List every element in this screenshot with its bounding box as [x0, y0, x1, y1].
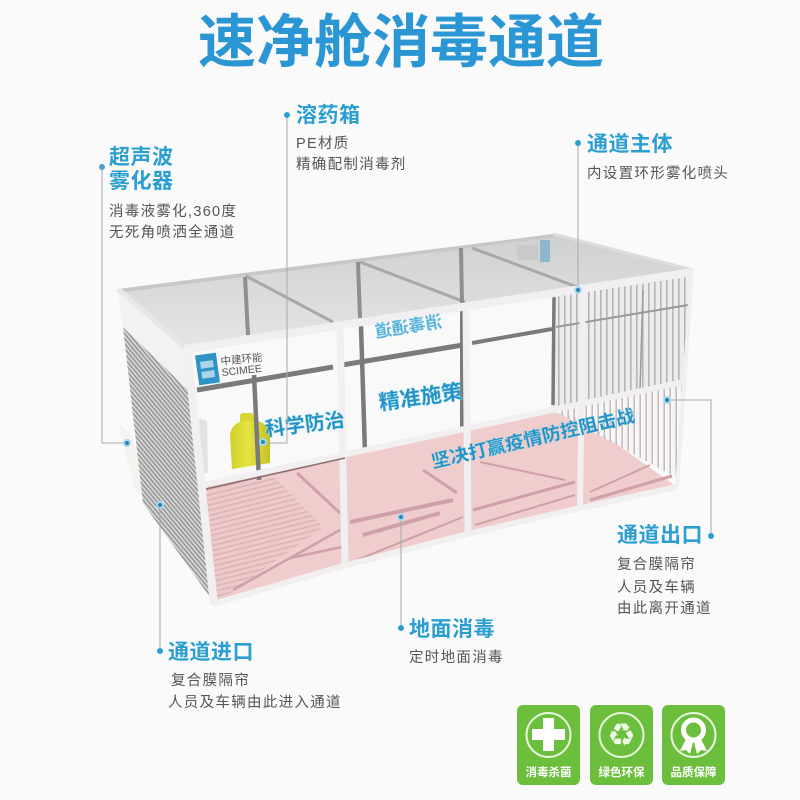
disinfection channel structure	[118, 234, 693, 605]
callout: channel entrance: 通道进口	[168, 641, 254, 664]
badge: disinfect and sterilize: 消毒杀菌	[526, 765, 572, 779]
roof	[118, 234, 693, 347]
callout: channel exit: 由此离开通道	[617, 600, 712, 617]
callout: floor disinfection	[398, 514, 504, 666]
badge: quality assurance	[662, 705, 725, 785]
callout: channel entrance: 人员及车辆由此进入通道	[168, 694, 342, 711]
badge: disinfect and sterilize	[517, 705, 580, 785]
callout: channel entrance: 复合膜隔帘	[171, 671, 250, 689]
callout: channel exit: 通道出口	[617, 524, 703, 547]
callout: channel entrance	[157, 502, 342, 711]
roof beams	[246, 248, 580, 322]
back wall	[187, 292, 553, 487]
logo panel: 中建环能	[220, 351, 264, 368]
right end gate	[553, 273, 690, 408]
front white frame	[118, 234, 693, 605]
floor shadows	[233, 462, 672, 590]
logo panel	[195, 351, 264, 385]
badge: green environmental	[590, 705, 653, 785]
floor	[206, 412, 677, 603]
callout: channel body	[575, 133, 729, 293]
yellow medicine tank	[230, 413, 270, 469]
callout: channel exit	[617, 397, 714, 617]
badge: quality assurance: 品质保障	[670, 765, 717, 779]
logo panel: SCIMEE	[221, 363, 262, 379]
slogan: win the battle: 坚决打赢疫情防控阻击战	[429, 405, 637, 472]
callout: medicine tank	[260, 104, 407, 445]
callout: medicine tank: 溶药箱	[296, 104, 360, 127]
slogan: precise measures: 精准施策	[377, 380, 464, 415]
callout: channel exit: 人员及车辆	[617, 579, 696, 596]
callout: channel exit: 复合膜隔帘	[617, 555, 696, 573]
title: 速净舱消毒通道	[198, 10, 604, 75]
callout: floor disinfection: 地面消毒	[409, 618, 495, 641]
callout: ultrasonic atomizer	[99, 146, 237, 446]
badge: green environmental: 绿色环保	[598, 765, 645, 779]
callout: ultrasonic atomizer: 超声波	[109, 146, 174, 169]
back wall posts and rail	[197, 248, 554, 480]
atomizer box	[119, 423, 150, 500]
slogan: scientific prevention: 科学防治	[264, 408, 346, 441]
callout: medicine tank: PE材质	[296, 135, 350, 152]
back logo mirrored	[517, 240, 550, 262]
callout: medicine tank: 精确配制消毒剂	[296, 156, 407, 173]
callout: channel body: 内设置环形雾化喷头	[587, 165, 729, 182]
callout: ultrasonic atomizer: 雾化器	[109, 170, 174, 193]
lower right curtain stripes	[553, 385, 683, 478]
callout: ultrasonic atomizer: 消毒液雾化,360度	[109, 203, 237, 220]
callout: channel body: 通道主体	[587, 133, 673, 156]
callout: floor disinfection: 定时地面消毒	[409, 649, 504, 666]
badge: green environmental: ♻	[607, 716, 636, 754]
inset frame	[199, 418, 208, 474]
left side mesh wall	[123, 327, 212, 600]
callout: ultrasonic atomizer: 无死角喷洒全通道	[109, 223, 235, 241]
mirrored wall text: 消毒通道	[373, 311, 444, 342]
